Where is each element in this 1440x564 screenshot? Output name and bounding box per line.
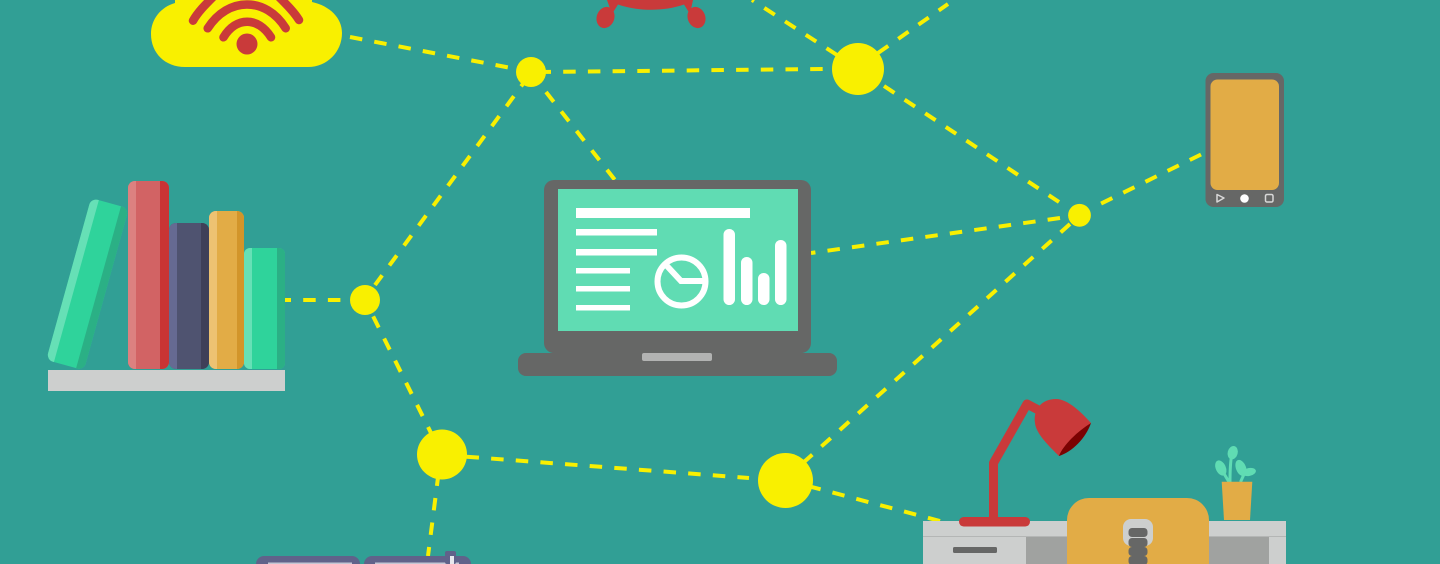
icon: wifi cloud — [151, 0, 342, 67]
icon: desk with lamp, chair and plant — [923, 399, 1286, 564]
orange chair — [1067, 498, 1209, 564]
red book — [128, 181, 169, 369]
network nodes — [350, 43, 1091, 508]
laptop screen — [558, 189, 798, 331]
green book — [244, 248, 285, 369]
orange book — [209, 211, 244, 369]
bar chart — [724, 229, 786, 305]
icon: laptop with dashboard — [518, 180, 837, 376]
tilted green book — [46, 198, 129, 370]
icon: red chair at top — [594, 0, 708, 31]
desk lamp — [959, 399, 1091, 526]
icon: open book at bottom — [256, 551, 471, 564]
icon: books on shelf — [46, 181, 285, 391]
pie chart — [658, 258, 706, 306]
navy book — [169, 223, 209, 369]
text lines — [576, 208, 750, 310]
desk — [923, 521, 1286, 564]
network connections — [278, 0, 1201, 556]
icon: smartphone — [1206, 73, 1284, 207]
potted plant — [1213, 445, 1257, 520]
shelf — [48, 370, 285, 391]
